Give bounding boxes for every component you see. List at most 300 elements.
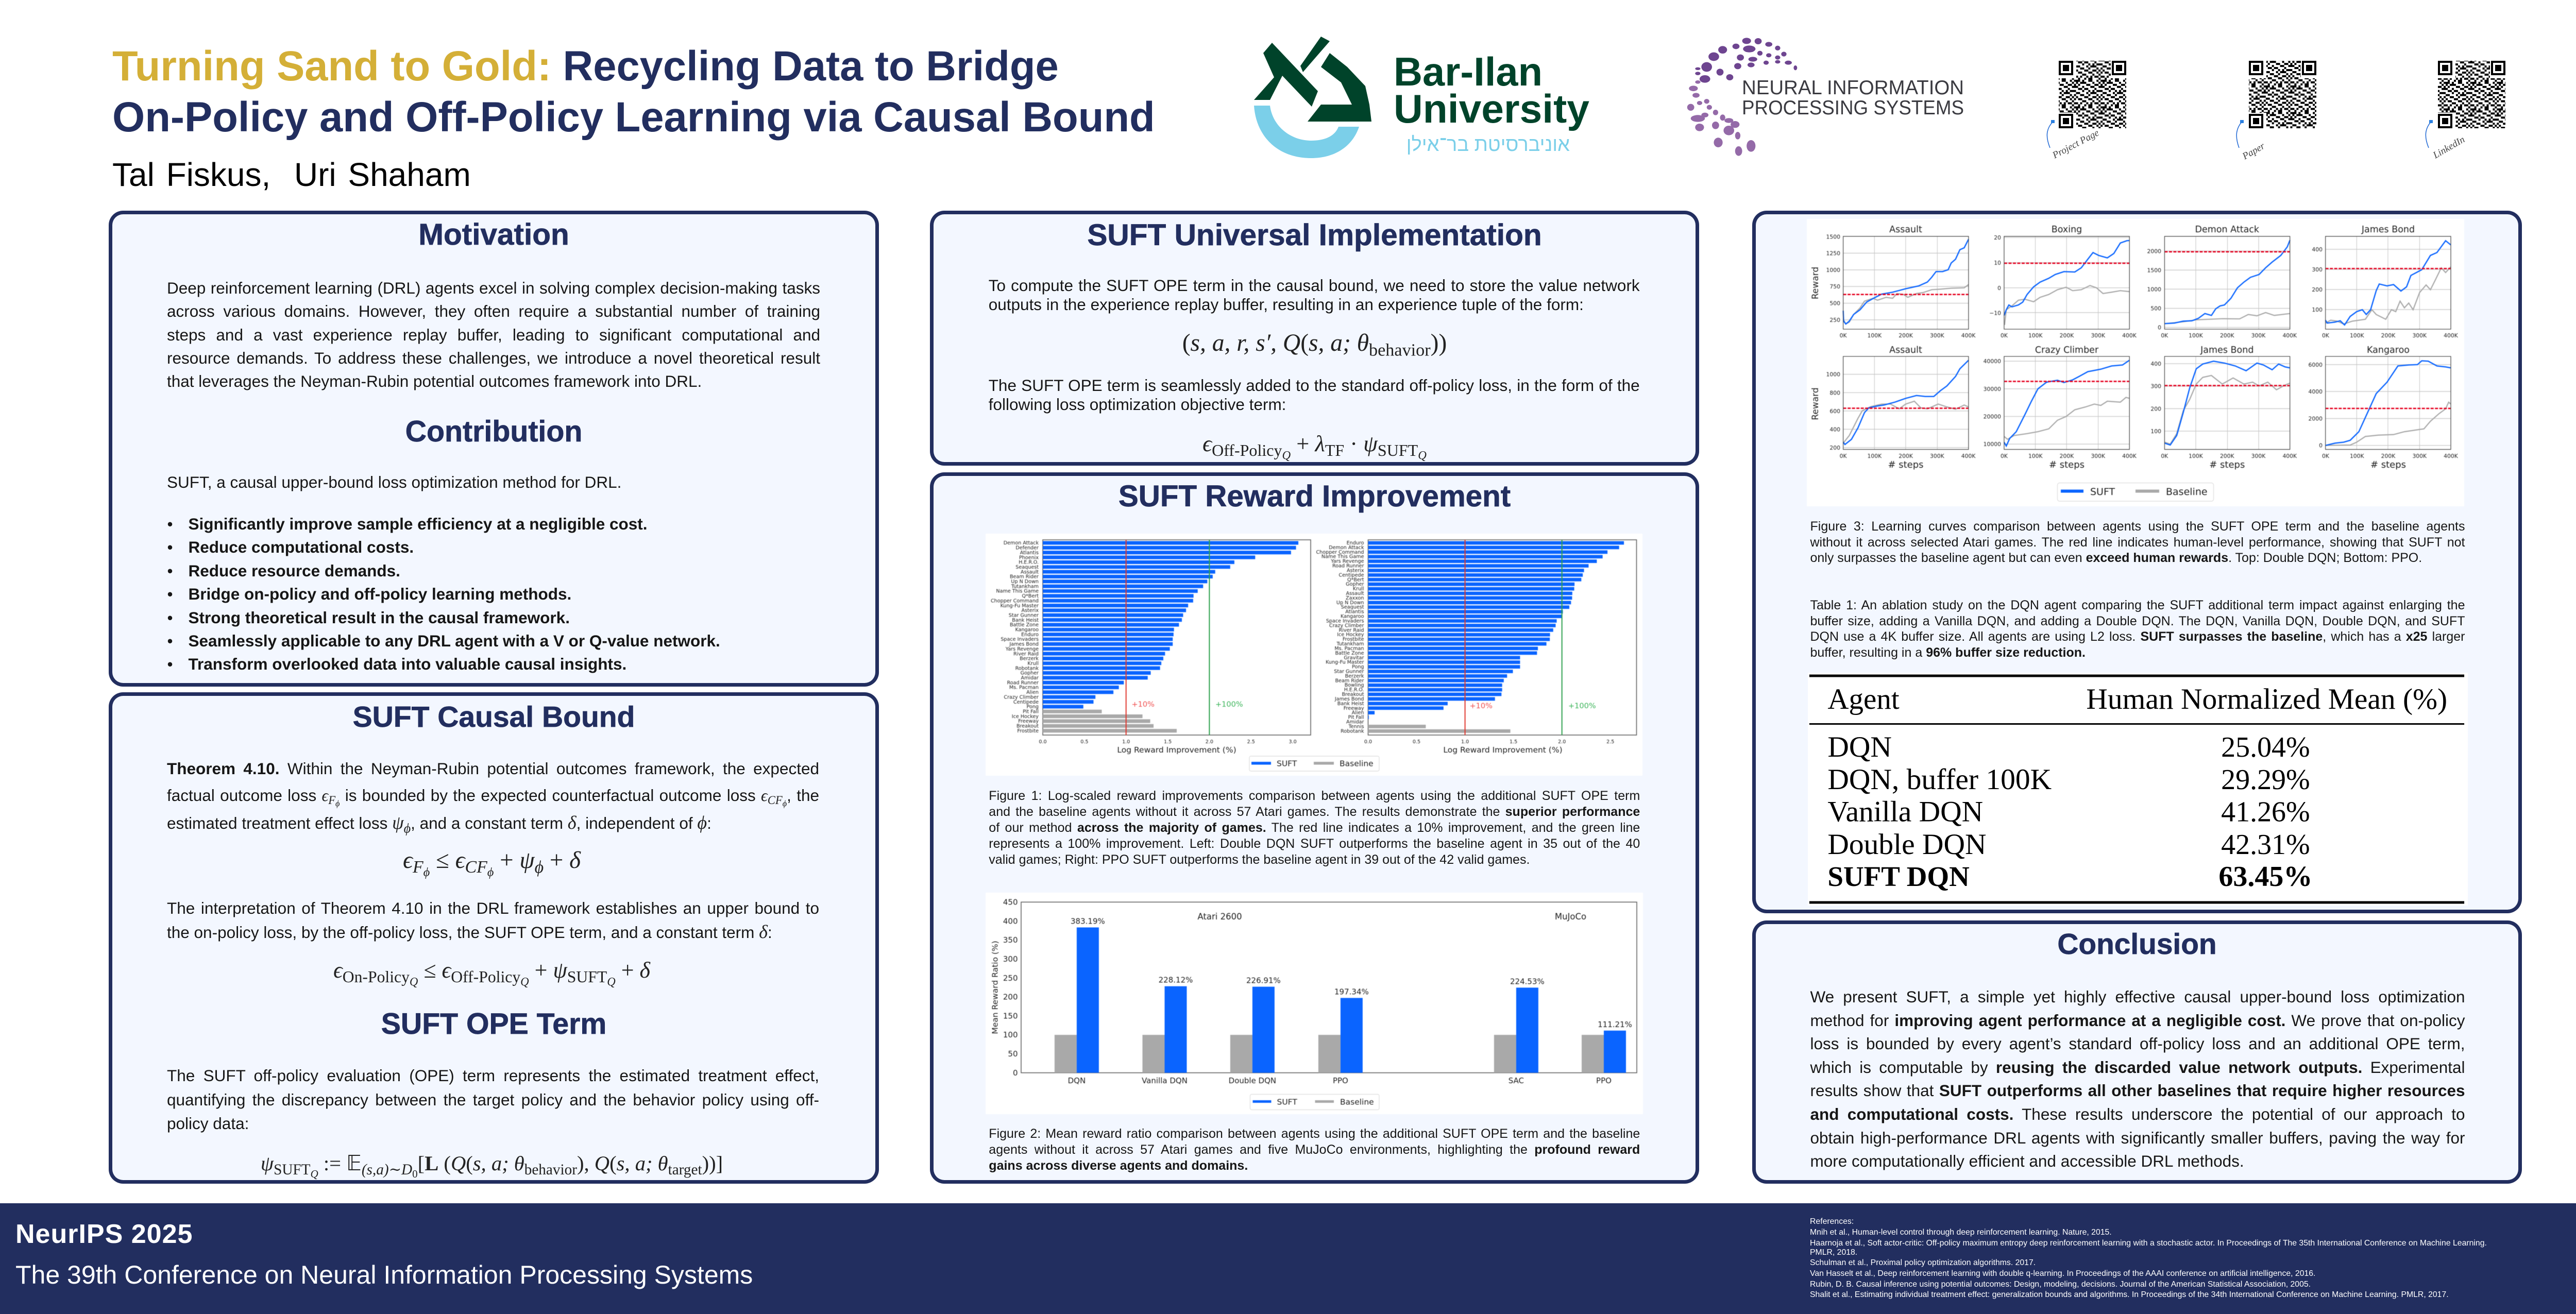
bar chart: Double DQN per-game improvement: Phoenix bbox=[1019, 555, 1039, 560]
subplot: James Bond (Double DQN): James Bond bbox=[2361, 225, 2415, 235]
equation: on-policy upper bound: ϵOn-PolicyQ ≤ ϵOff-PolicyQ + ψSUFTQ + δ bbox=[333, 958, 650, 988]
subplot: Assault (Double DQN): 100K bbox=[1868, 332, 1882, 339]
bar chart: Double DQN per-game improvement: Space Invaders bbox=[1001, 637, 1039, 642]
subplot: Crazy Climber: 30000 bbox=[1984, 386, 2001, 393]
axis ticks and labels: 0 bbox=[1012, 1068, 1018, 1078]
caption: figure 2 bbox=[989, 1126, 1640, 1173]
subplot: Kangaroo: 300K bbox=[2412, 453, 2427, 459]
bar chart: Double DQN per-game improvement: Centipede bbox=[1013, 699, 1039, 705]
subplot: Kangaroo: 6000 bbox=[2309, 362, 2323, 368]
subplot: Assault (PPO): Assault bbox=[1889, 345, 1922, 355]
caption: figure 1: and the baseline agents without it across 57 Atari games. The results demonstrate the superior performance bbox=[989, 805, 1640, 819]
subplot: Boxing: 400K bbox=[2122, 332, 2137, 339]
text: OPE term description: quantifying the discrepancy between the target policy and the behavior policy using off- bbox=[167, 1090, 819, 1108]
subplot: Assault (PPO): 200K bbox=[1899, 453, 1913, 459]
text: conclusion paragraph: results show that SUFT outperforms all other baselines that require higher resources bbox=[1810, 1081, 2465, 1100]
subplot: Assault (Double DQN): 300K bbox=[1930, 332, 1945, 339]
subplot: Demon Attack: 400K bbox=[2282, 332, 2297, 339]
bar chart: Double DQN per-game improvement: Q*Bert bbox=[1022, 593, 1039, 599]
text: motivation paragraph: that leverages the Neyman-Rubin potential outcomes framework into DRL. bbox=[167, 372, 702, 390]
footer: conference name: NeurIPS 2025 bbox=[15, 1219, 193, 1249]
axis ticks and labels: 350 bbox=[1003, 935, 1018, 945]
subplot: Crazy Climber: 400K bbox=[2122, 453, 2137, 459]
subplot: Kangaroo: 0 bbox=[2319, 442, 2323, 449]
bar chart: Double DQN per-game improvement: Amidar bbox=[1021, 675, 1039, 681]
bar chart: Double DQN per-game improvement: James Bond bbox=[1009, 642, 1039, 647]
footer: references: References: bbox=[1810, 1217, 1854, 1226]
subplot: Assault (Double DQN) bbox=[1826, 225, 1976, 339]
bar chart: Double DQN per-game improvement: +10% bbox=[1131, 701, 1155, 709]
bar chart: PPO per-game improvement: James Bond bbox=[1334, 696, 1364, 702]
table: human normalized mean: 29.29% bbox=[2221, 764, 2310, 796]
text: conclusion paragraph: more computationally efficient and accessible DRL methods. bbox=[1810, 1152, 2244, 1170]
subplot: Assault (PPO): 1000 bbox=[1826, 371, 1840, 378]
bar chart: PPO per-game improvement: Atlantis bbox=[1345, 609, 1364, 615]
bar chart: Double DQN per-game improvement: 1.0 bbox=[1122, 739, 1130, 745]
axis ticks and labels: PPO bbox=[1596, 1076, 1611, 1085]
chart: figure 1 log reward improvement bbox=[986, 534, 1642, 776]
subplot: Assault (PPO) bbox=[1826, 345, 1976, 470]
bar chart: Double DQN per-game improvement: Robotank bbox=[1015, 665, 1039, 671]
bar chart: PPO per-game improvement: Yars Revenge bbox=[1330, 559, 1364, 565]
text: loss paragraph bbox=[989, 376, 1640, 414]
bar chart: Double DQN per-game improvement: Krull bbox=[1027, 661, 1039, 667]
group labels: MuJoCo bbox=[1554, 912, 1586, 921]
caption: figure 3: without it across selected Atari games. The red line indicates human-level performance, showing that SUFT not bbox=[1810, 535, 2465, 550]
subplot: Demon Attack: 0 bbox=[2158, 325, 2161, 331]
text: implementation paragraph: To compute the SUFT OPE term in the causal bound, we need to store the value network bbox=[989, 276, 1640, 295]
text: theorem: factual outcome loss ϵFϕ is bounded by the expected counterfactual outcome loss ϵCFϕ, the bbox=[167, 786, 819, 809]
text: interpretation: the on-policy loss, by the off-policy loss, the SUFT OPE term, and a constant term δ: bbox=[167, 921, 772, 942]
bar chart: PPO per-game improvement: Name This Game bbox=[1321, 554, 1364, 560]
text: motivation paragraph: resource demands. To address these challenges, we introduce a novel theoretical result bbox=[167, 349, 820, 367]
footer: references: Rubin, D. B. Causal inference using potential outcomes: Design, modeling, decisions. Journal of the American Statistical Association, 2005. bbox=[1810, 1280, 2311, 1289]
table: human normalized mean bbox=[1808, 673, 2468, 906]
bar chart: PPO per-game improvement: Ms. Pacman bbox=[1334, 646, 1364, 652]
caption: figure 2: agents without it across 57 Atari games and five MuJoCo environments, highlighting the profound reward bbox=[989, 1142, 1640, 1157]
table: human normalized mean: Vanilla DQN bbox=[1827, 795, 1983, 828]
subplot: Assault (Double DQN): 0K bbox=[1840, 332, 1847, 339]
bar chart: PPO per-game improvement: Bank Heist bbox=[1337, 701, 1364, 707]
caption: table 1: Table 1: An ablation study on the DQN agent comparing the SUFT additional term impact against enlarging the bbox=[1810, 598, 2465, 612]
bar chart: Double DQN per-game improvement: 0.5 bbox=[1080, 739, 1089, 745]
bar value labels: 111.21% bbox=[1598, 1020, 1632, 1029]
axis ticks and labels: 450 bbox=[1003, 897, 1018, 907]
group labels bbox=[1197, 912, 1586, 921]
text: theorem bbox=[167, 759, 819, 835]
subplot: Kangaroo: # steps bbox=[2370, 459, 2406, 470]
bar chart: Double DQN per-game improvement: H.E.R.O. bbox=[1019, 560, 1039, 566]
subplot: Assault (Double DQN): Assault bbox=[1889, 225, 1922, 235]
bar chart: PPO per-game improvement: Frostbite bbox=[1343, 637, 1364, 642]
footer: references: Mnih et al., Human-level control through deep reinforcement learning. Nature, 2015. bbox=[1810, 1228, 2112, 1237]
panel: motivation and contribution: • bbox=[167, 515, 173, 533]
bar chart: Double DQN per-game improvement: Log Reward Improvement (%) bbox=[1117, 745, 1236, 755]
subplot: Kangaroo: 200K bbox=[2381, 453, 2396, 459]
subplot: James Bond (PPO): James Bond bbox=[2200, 345, 2253, 355]
bar value labels: 228.12% bbox=[1158, 976, 1193, 985]
bar chart: Double DQN per-game improvement: Ice Hockey bbox=[1012, 714, 1039, 720]
axis ticks and labels: DQN bbox=[1067, 1076, 1086, 1085]
bar chart: PPO per-game improvement: Amidar bbox=[1346, 719, 1364, 725]
heading: Conclusion: Conclusion bbox=[2057, 928, 2217, 961]
footer: references: PMLR, 2018. bbox=[1810, 1248, 1857, 1257]
group labels: Atari 2600 bbox=[1197, 912, 1242, 921]
bar chart: Double DQN per-game improvement: Bank Heist bbox=[1012, 618, 1039, 623]
axis ticks and labels: 100 bbox=[1003, 1030, 1018, 1039]
subplot: James Bond (Double DQN): 400K bbox=[2444, 332, 2459, 339]
subplot: Crazy Climber: 200K bbox=[2060, 453, 2074, 459]
caption: table 1: buffer, resulting in a 96% buffer size reduction. bbox=[1810, 645, 2086, 660]
panel: motivation and contribution: • bbox=[167, 655, 173, 673]
subplot: James Bond (PPO) bbox=[2150, 345, 2297, 470]
axis ticks and labels: Vanilla DQN bbox=[1142, 1076, 1187, 1085]
subplot: Kangaroo: 400K bbox=[2444, 453, 2459, 459]
bar chart: PPO per-game improvement: Bowling bbox=[1345, 682, 1364, 688]
bar chart: Double DQN per-game improvement: River Raid bbox=[1013, 651, 1039, 657]
bar chart: PPO per-game improvement: 0.0 bbox=[1364, 739, 1372, 745]
table: human normalized mean: Agent bbox=[1827, 683, 1899, 715]
subplot: James Bond (Double DQN): 0K bbox=[2322, 332, 2330, 339]
bar chart: PPO per-game improvement: 1.5 bbox=[1510, 739, 1517, 745]
bar chart: PPO per-game improvement: Assault bbox=[1346, 591, 1364, 596]
subplot: Crazy Climber bbox=[1984, 345, 2137, 470]
footer: conference full title: The 39th Conference on Neural Information Processing Systems bbox=[15, 1260, 753, 1289]
panel: motivation and contribution: • bbox=[167, 561, 173, 580]
list: contribution bullets: Reduce computational costs. bbox=[189, 538, 414, 556]
axis ticks and labels: Double DQN bbox=[1228, 1076, 1276, 1085]
bar chart: PPO per-game improvement: Ice Hockey bbox=[1337, 632, 1364, 638]
table: human normalized mean: 42.31% bbox=[2221, 829, 2310, 861]
subplot: Assault (PPO): 300K bbox=[1930, 453, 1945, 459]
caption: figure 3: Figure 3: Learning curves comparison between agents using the SUFT OPE term and the baseline agents bbox=[1810, 519, 2465, 534]
axis ticks and labels: 50 bbox=[1008, 1049, 1018, 1059]
bar chart: PPO per-game improvement: Kangaroo bbox=[1341, 614, 1364, 620]
text: conclusion paragraph: which is computable by reusing the discarded value network outputs. Experimental bbox=[1810, 1058, 2465, 1077]
bar chart: PPO per-game improvement: Gopher bbox=[1346, 582, 1364, 587]
bar chart: Double DQN per-game improvement: Alien bbox=[1026, 690, 1039, 695]
bar chart: PPO per-game improvement: 2.0 bbox=[1558, 739, 1566, 745]
table: human normalized mean: DQN bbox=[1827, 731, 1892, 763]
bar chart: PPO per-game improvement: Chopper Command bbox=[1316, 550, 1364, 555]
handwritten label: Paper: Paper bbox=[2240, 141, 2267, 162]
bar chart: Double DQN per-game improvement: Defender bbox=[1015, 545, 1039, 551]
subplot: Assault (Double DQN): 500 bbox=[1829, 300, 1840, 307]
bar chart: Double DQN per-game improvement: Assault bbox=[1021, 569, 1039, 575]
bar chart: PPO per-game improvement: Pong bbox=[1352, 664, 1364, 670]
bar chart: PPO per-game improvement bbox=[1316, 540, 1636, 755]
subplot: Crazy Climber: 10000 bbox=[1984, 441, 2001, 448]
axis ticks and labels bbox=[990, 897, 1611, 1085]
arrow: project page bbox=[2047, 122, 2053, 148]
bar value labels: 197.34% bbox=[1334, 987, 1368, 996]
subplot: Kangaroo: Kangaroo bbox=[2367, 345, 2410, 355]
legend: figure 1: SUFT bbox=[1277, 759, 1297, 769]
legend: figure 2: SUFT bbox=[1277, 1097, 1297, 1106]
subplot: Assault (Double DQN): 1250 bbox=[1826, 250, 1840, 257]
subplot: Assault (Double DQN): 1500 bbox=[1826, 234, 1840, 241]
bar chart: PPO per-game improvement: Alien bbox=[1352, 710, 1364, 716]
bar chart: PPO per-game improvement: 0.5 bbox=[1413, 739, 1420, 745]
bar chart: PPO per-game improvement: +100% bbox=[1568, 702, 1596, 710]
QR code: paper bbox=[2248, 60, 2319, 131]
bar value labels: 224.53% bbox=[1510, 977, 1544, 986]
caption: figure 1: valid games; Right: PPO SUFT outperforms the baseline agent in 39 out of the 42 valid games. bbox=[989, 852, 1530, 867]
bars: baseline bbox=[1054, 1035, 1603, 1073]
subplot: Crazy Climber: 0K bbox=[2001, 453, 2008, 459]
bar chart: PPO per-game improvement: Gravitar bbox=[1344, 655, 1364, 661]
bar chart: Double DQN per-game improvement: Freeway bbox=[1018, 719, 1039, 724]
panel: motivation and contribution: • bbox=[167, 632, 173, 650]
heading: Contribution: Contribution bbox=[405, 415, 582, 448]
caption: figure 1: of our method across the majority of games. The red line indicates a 10% improvement, and the green line bbox=[989, 821, 1640, 835]
y axis label: top row: Reward bbox=[1810, 267, 1821, 299]
axis ticks and labels: 200 bbox=[1003, 992, 1018, 1001]
subplot: Assault (PPO): 600 bbox=[1829, 408, 1840, 415]
caption: figure 2: gains across diverse agents and domains. bbox=[989, 1158, 1248, 1172]
bar chart: PPO per-game improvement: 2.5 bbox=[1606, 739, 1614, 745]
bar chart: PPO per-game improvement: Asterix bbox=[1347, 568, 1364, 573]
arrow: paper bbox=[2236, 122, 2242, 148]
text: conclusion paragraph: We present SUFT, a simple yet highly effective causal upper-bound loss optimization bbox=[1810, 987, 2465, 1006]
subplot: Crazy Climber: 40000 bbox=[1984, 358, 2001, 365]
caption: table 1 bbox=[1810, 598, 2465, 661]
bar chart: PPO per-game improvement: Robotank bbox=[1341, 728, 1364, 734]
logo: Bar-Ilan University: Bar-Ilan bbox=[1394, 49, 1543, 94]
axis ticks and labels: 250 bbox=[1003, 974, 1018, 983]
table: human normalized mean: Human Normalized Mean (%) bbox=[2086, 683, 2447, 715]
bar chart: PPO per-game improvement: 1.0 bbox=[1461, 739, 1469, 745]
text: loss paragraph: The SUFT OPE term is seamlessly added to the standard off-policy loss, in the form of the bbox=[989, 376, 1640, 395]
list: contribution bullets: Reduce resource demands. bbox=[189, 561, 400, 580]
logo: Bar-Ilan University bbox=[1254, 37, 1589, 158]
bar chart: PPO per-game improvement: Tutankham bbox=[1336, 641, 1364, 647]
subplot: Kangaroo: 2000 bbox=[2309, 416, 2323, 422]
legend: figure 3: SUFT bbox=[2090, 486, 2115, 498]
subplot: Demon Attack: 500 bbox=[2150, 305, 2161, 312]
bar chart: PPO per-game improvement: Q*Bert bbox=[1347, 577, 1364, 583]
text: loss paragraph: following loss optimization objective term: bbox=[989, 395, 1286, 414]
title: Turning Sand to Gold: Recycling Data to Bridge bbox=[112, 43, 1059, 90]
legend: figure 2 bbox=[1250, 1094, 1379, 1110]
arrow head: project page bbox=[2051, 120, 2055, 123]
bar chart: Double DQN per-game improvement: 1.5 bbox=[1164, 739, 1172, 745]
logo: Neural Information Processing Systems: NEURAL INFORMATION bbox=[1742, 77, 1964, 99]
panel: reward improvement bbox=[930, 472, 1699, 1184]
text: contribution intro: SUFT, a causal upper-bound loss optimization method for DRL. bbox=[167, 473, 621, 491]
list: contribution bullets: Strong theoretical result in the causal framework. bbox=[189, 608, 570, 627]
table: human normalized mean: DQN, buffer 100K bbox=[1827, 763, 2052, 796]
subplot: Boxing: 300K bbox=[2091, 332, 2106, 339]
axis ticks and labels: 300 bbox=[1003, 954, 1018, 964]
subplot: Crazy Climber: 300K bbox=[2091, 453, 2106, 459]
bar chart: PPO per-game improvement: Enduro bbox=[1347, 540, 1364, 546]
legend: figure 3 bbox=[2058, 483, 2213, 501]
bar chart: Double DQN per-game improvement: Pong bbox=[1027, 704, 1039, 710]
subplot: Boxing: 0K bbox=[2001, 332, 2008, 339]
subplot: Boxing: 200K bbox=[2060, 332, 2074, 339]
subplot: Assault (Double DQN): 200K bbox=[1899, 332, 1913, 339]
subplot: Kangaroo bbox=[2309, 345, 2459, 470]
footer: references: Schulman et al., Proximal policy optimization algorithms. 2017. bbox=[1810, 1258, 2036, 1267]
table: human normalized mean: SUFT DQN bbox=[1827, 861, 1969, 892]
logo: Bar-Ilan University: אוניברסיטת בר־אילן bbox=[1406, 134, 1570, 156]
subplot: Boxing: 100K bbox=[2028, 332, 2043, 339]
subplot: James Bond (PPO): 400K bbox=[2282, 453, 2297, 459]
caption: figure 2: Figure 2: Mean reward ratio comparison between agents using the additional SUFT OPE term and the baseline bbox=[989, 1126, 1640, 1140]
bar chart: PPO per-game improvement: Crazy Climber bbox=[1329, 623, 1364, 628]
handwritten label: Project Page: Project Page bbox=[2050, 127, 2101, 161]
bar chart: PPO per-game improvement: Star Gunner bbox=[1334, 669, 1364, 674]
subplot: Boxing: 10 bbox=[1994, 260, 2001, 266]
bar chart: Double DQN per-game improvement: Yars Revenge bbox=[1005, 646, 1039, 652]
subplot: Kangaroo: 4000 bbox=[2309, 388, 2323, 395]
axis ticks and labels: Mean Reward Ratio (%) bbox=[990, 941, 999, 1034]
bar chart: Double DQN per-game improvement: Star Gunner bbox=[1009, 612, 1039, 618]
panel: universal implementation bbox=[930, 211, 1699, 466]
heading: SUFT Causal Bound: SUFT Causal Bound bbox=[353, 701, 635, 733]
QR code: LinkedIn bbox=[2437, 60, 2509, 131]
bar chart: PPO per-game improvement: Demon Attack bbox=[1329, 545, 1364, 551]
bar chart: Double DQN per-game improvement: 2.5 bbox=[1247, 739, 1255, 745]
bar chart: Double DQN per-game improvement: Gopher bbox=[1021, 671, 1039, 676]
equation: objective term: ϵOff-PolicyQ + λTF · ψSUFTQ bbox=[1202, 431, 1427, 462]
caption: figure 3 bbox=[1810, 519, 2465, 566]
subplot: Assault (PPO): 800 bbox=[1829, 389, 1840, 396]
bar chart: Double DQN per-game improvement: Tutankham bbox=[1011, 584, 1039, 589]
subplot: Assault (Double DQN): 250 bbox=[1829, 317, 1840, 323]
caption: figure 1: Figure 1: Log-scaled reward improvements comparison between agents using the additional SUFT OPE term bbox=[989, 789, 1640, 803]
panel: motivation and contribution: • bbox=[167, 608, 173, 627]
subplot: Crazy Climber: 100K bbox=[2028, 453, 2043, 459]
text: implementation paragraph bbox=[989, 276, 1640, 314]
subplot: James Bond (PPO): # steps bbox=[2209, 459, 2245, 470]
bar value labels: 226.91% bbox=[1246, 976, 1280, 985]
title: On-Policy and Off-Policy Learning via Causal Bound bbox=[112, 94, 1155, 141]
caption: figure 3: only surpasses the baseline agent but can even exceed human rewards. Top: Double DQN; Bottom: PPO. bbox=[1810, 551, 2422, 565]
handwritten label: LinkedIn: LinkedIn bbox=[2431, 134, 2467, 161]
equation: causal bound: ϵFϕ ≤ ϵCFϕ + ψϕ + δ bbox=[403, 847, 581, 879]
text: motivation paragraph bbox=[167, 279, 820, 390]
text: conclusion paragraph: method for improving agent performance at a negligible cost. We prove that on-policy bbox=[1810, 1011, 2465, 1030]
bar chart: Double DQN per-game improvement: 3.0 bbox=[1289, 739, 1297, 745]
bar chart: Double DQN per-game improvement: Breakout bbox=[1016, 724, 1039, 729]
bar chart: PPO per-game improvement: River Raid bbox=[1338, 627, 1364, 633]
legend: figure 1 bbox=[1249, 756, 1379, 771]
logo: Neural Information Processing Systems bbox=[1687, 38, 1964, 156]
bar chart: Double DQN per-game improvement bbox=[991, 540, 1311, 755]
subplot: James Bond (Double DQN): 200 bbox=[2312, 286, 2323, 293]
subplot: James Bond (PPO): 300 bbox=[2150, 383, 2161, 390]
footer: references: Haarnoja et al., Soft actor-critic: Off-policy maximum entropy deep reinforcement learning with a stochastic actor. In Proceedings of The 35th International Conference on Machine Learning. bbox=[1810, 1239, 2487, 1248]
bar chart: Double DQN per-game improvement: Chopper Command bbox=[991, 598, 1039, 604]
heading: Motivation: Motivation bbox=[418, 218, 569, 251]
subplot: James Bond (Double DQN): 200K bbox=[2381, 332, 2396, 339]
subplot: Demon Attack: 1500 bbox=[2147, 267, 2161, 274]
subplot: Assault (PPO): 400K bbox=[1961, 453, 1976, 459]
subplot: James Bond (PPO): 0K bbox=[2161, 453, 2168, 459]
bar chart: PPO per-game improvement: Space Invaders bbox=[1326, 618, 1364, 624]
heading: SUFT OPE Term: SUFT OPE Term bbox=[381, 1008, 606, 1040]
bar chart: Double DQN per-game improvement: 0.0 bbox=[1039, 739, 1047, 745]
text: theorem: estimated treatment effect loss ψϕ, and a constant term δ, independent of ϕ: bbox=[167, 812, 711, 835]
panel: learning curves and ablation table bbox=[1752, 211, 2522, 913]
bar chart: Double DQN per-game improvement: Atlantis bbox=[1020, 550, 1039, 556]
text: conclusion paragraph bbox=[1810, 985, 2465, 1173]
text: implementation paragraph: outputs in the experience replay buffer, resulting in an experience tuple of the form: bbox=[989, 295, 1584, 314]
subplot: James Bond (Double DQN): 100 bbox=[2312, 306, 2323, 313]
bar value labels: 383.19% bbox=[1071, 917, 1105, 926]
chart: figure 3 learning curves bbox=[1807, 219, 2464, 506]
footer band bbox=[0, 1203, 2576, 1314]
equation: OPE term: ψSUFTQ := 𝔼(s,a)∼D0[L (Q(s, a; θbehavior), Q(s, a; θtarget))] bbox=[261, 1151, 723, 1180]
axis ticks and labels: SAC bbox=[1508, 1076, 1524, 1085]
footer: references: Van Hasselt et al., Deep reinforcement learning with double q-learning. In Proceedings of the AAAI conference on artificial intelligence, 2016. bbox=[1810, 1269, 2315, 1278]
legend: figure 3: Baseline bbox=[2166, 486, 2208, 498]
bar chart: Double DQN per-game improvement: Berzerk bbox=[1020, 656, 1039, 662]
panel: motivation and contribution bbox=[109, 211, 879, 687]
text: OPE term description bbox=[167, 1066, 819, 1133]
subplot: Crazy Climber: # steps bbox=[2049, 459, 2084, 470]
subplot: Demon Attack: 2000 bbox=[2147, 248, 2161, 254]
bar chart: PPO per-game improvement: Krull bbox=[1353, 586, 1364, 592]
subplot: Boxing: Boxing bbox=[2052, 225, 2082, 235]
bars: SUFT bbox=[1076, 927, 1626, 1073]
subplot: Demon Attack: 1000 bbox=[2147, 286, 2161, 293]
table: human normalized mean: 63.45% bbox=[2218, 861, 2312, 893]
subplot: James Bond (PPO): 100 bbox=[2150, 428, 2161, 435]
subplot: Boxing: 0 bbox=[1997, 285, 2001, 292]
subplot: Kangaroo: 0K bbox=[2322, 453, 2330, 459]
arrow head: paper bbox=[2240, 120, 2244, 123]
arrow: LinkedIn bbox=[2426, 122, 2431, 148]
text: motivation paragraph: steps and a vast experience replay buffer, leading to significant computational and bbox=[167, 326, 820, 344]
list: contribution bullets bbox=[167, 515, 720, 673]
subplot: Crazy Climber: 20000 bbox=[1984, 413, 2001, 420]
bar chart: Double DQN per-game improvement: Crazy Climber bbox=[1004, 694, 1039, 700]
bar chart: PPO per-game improvement: Road Runner bbox=[1332, 564, 1364, 569]
bar chart: PPO per-game improvement: Pit Fall bbox=[1348, 715, 1364, 721]
bar chart: Double DQN per-game improvement: Frostbite bbox=[1017, 728, 1039, 734]
text: interpretation bbox=[167, 899, 819, 942]
subplot: Kangaroo: 100K bbox=[2350, 453, 2365, 459]
caption: table 1: DQN use a 4K buffer size. All agents are using L2 loss. SUFT surpasses the baseline, which has a x25 larger bbox=[1810, 629, 2465, 644]
bar chart: PPO per-game improvement: Log Reward Improvement (%) bbox=[1443, 745, 1563, 755]
subplot: James Bond (PPO): 200K bbox=[2220, 453, 2235, 459]
subplot: Boxing bbox=[1989, 225, 2137, 339]
text: conclusion paragraph: obtain high-performance DRL agents with significantly smaller buffers, paving the way for bbox=[1810, 1129, 2465, 1147]
bar value labels bbox=[1071, 917, 1632, 1029]
subplot: James Bond (Double DQN): 300 bbox=[2312, 266, 2323, 273]
bar chart: Double DQN per-game improvement: Seaquest bbox=[1015, 565, 1039, 570]
subplot: Assault (Double DQN): 750 bbox=[1829, 283, 1840, 290]
footer: references: Shalit et al., Estimating individual treatment effect: generalization bounds and algorithms. In Proceedings of the 34th International Conference on Machine Learning. PMLR, 2017. bbox=[1810, 1290, 2449, 1299]
text: conclusion paragraph: and computational costs. These results underscore the potential of our approach to bbox=[1810, 1105, 2465, 1123]
logo: Bar-Ilan University: University bbox=[1394, 86, 1589, 131]
list: contribution bullets: Transform overlooked data into valuable causal insights. bbox=[189, 655, 626, 673]
heading: SUFT Universal Implementation: SUFT Universal Implementation bbox=[1087, 218, 1542, 252]
bar chart: PPO per-game improvement: Tennis bbox=[1348, 724, 1364, 729]
subplot: Assault (PPO): 0K bbox=[1840, 453, 1847, 459]
bar chart: Double DQN per-game improvement: Asterix bbox=[1021, 608, 1039, 613]
bar chart: Double DQN per-game improvement: Kung-Fu Master bbox=[1001, 603, 1039, 609]
QR code: project page bbox=[2058, 60, 2129, 131]
subplot: James Bond (PPO): 100K bbox=[2189, 453, 2204, 459]
table: human normalized mean: 25.04% bbox=[2221, 731, 2310, 763]
bar chart: PPO per-game improvement: Breakout bbox=[1342, 692, 1364, 697]
bar chart: Double DQN per-game improvement: Beam Rider bbox=[1010, 574, 1039, 580]
title bbox=[112, 43, 1155, 141]
